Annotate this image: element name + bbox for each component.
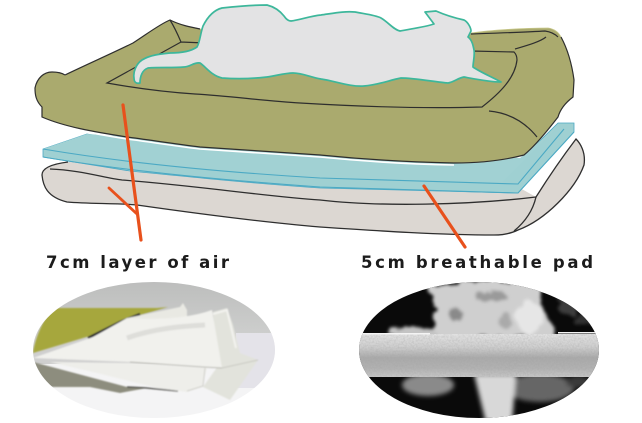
upper white pad (33, 310, 222, 368)
label: 7cm layer of air: 7cm layer of air (46, 253, 230, 272)
arrow: 7cm layer of air (109, 105, 141, 240)
back pad (203, 308, 258, 400)
bed illustration (35, 5, 584, 247)
green bed (35, 20, 574, 165)
rear fold (128, 303, 188, 320)
lower grey cover (33, 362, 147, 393)
lower white pad (50, 362, 207, 392)
label: 5cm breathable pad: 5cm breathable pad (361, 253, 593, 272)
arrow: 5cm breathable pad (424, 186, 465, 247)
steam below pad (399, 377, 588, 418)
fibre pad band (355, 334, 605, 377)
blue breathable pad (43, 123, 574, 193)
steam above pad (386, 282, 591, 334)
beige base cushion (42, 139, 584, 235)
olive top cover (33, 307, 168, 353)
photo: layered air cushions (30, 280, 280, 420)
cat silhouette (134, 5, 501, 86)
photo: steam through breathable pad (355, 278, 605, 423)
